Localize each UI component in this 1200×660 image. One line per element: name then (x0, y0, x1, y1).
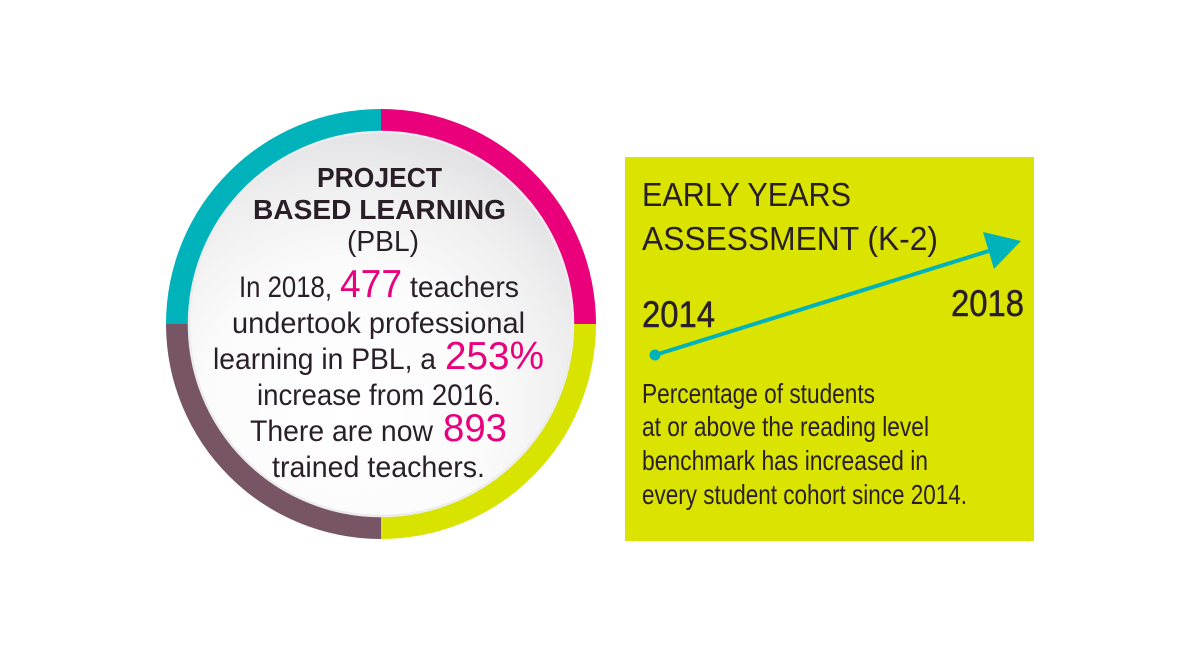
inner disc (189, 132, 573, 516)
text block: reading benchmark description (642, 378, 967, 510)
text block: PBL statistics: There are now (250, 415, 433, 448)
ring segment: pink (381, 109, 596, 324)
heading: project based learning: BASED LEARNING (253, 194, 506, 225)
text block: PBL statistics: 477 (340, 263, 402, 306)
text block: PBL statistics: trained teachers. (272, 451, 485, 484)
heading: project based learning: (PBL) (347, 226, 419, 258)
heading: project based learning: PROJECT (317, 162, 442, 193)
text block: reading benchmark description: Percentage of students (642, 378, 875, 409)
panel: early years assessment (625, 157, 1034, 541)
ring segment: mauve (166, 324, 381, 539)
text block: PBL statistics: teachers (410, 271, 519, 304)
heading: early years assessment: ASSESSMENT (K-2) (642, 220, 938, 257)
heading: project based learning (253, 162, 506, 258)
arrow: upward trend 2014 to 2018 (650, 232, 1021, 360)
text block: PBL statistics: learning in PBL, a (213, 343, 436, 376)
label: 2018: 2018 (951, 283, 1024, 324)
panel background (625, 157, 1034, 541)
label: 2014: 2014 (642, 294, 715, 335)
text block: PBL statistics (213, 263, 544, 484)
text block: PBL statistics: In 2018, (239, 271, 332, 304)
text block: reading benchmark description: benchmark has increased in (642, 445, 928, 476)
text block: reading benchmark description: every student cohort since 2014. (642, 479, 967, 510)
heading: early years assessment: EARLY YEARS (642, 176, 851, 213)
text block: PBL statistics: undertook professional (232, 307, 525, 340)
text block: PBL statistics: 253% (445, 335, 544, 378)
text block: PBL statistics: increase from 2016. (257, 379, 501, 412)
ring segment: teal (166, 109, 381, 324)
heading: early years assessment (642, 176, 938, 257)
text block: PBL statistics: 893 (443, 407, 507, 450)
text block: reading benchmark description: at or above the reading level (642, 411, 929, 442)
ring segment: lime (381, 324, 596, 539)
panel: project based learning circle (166, 109, 596, 539)
